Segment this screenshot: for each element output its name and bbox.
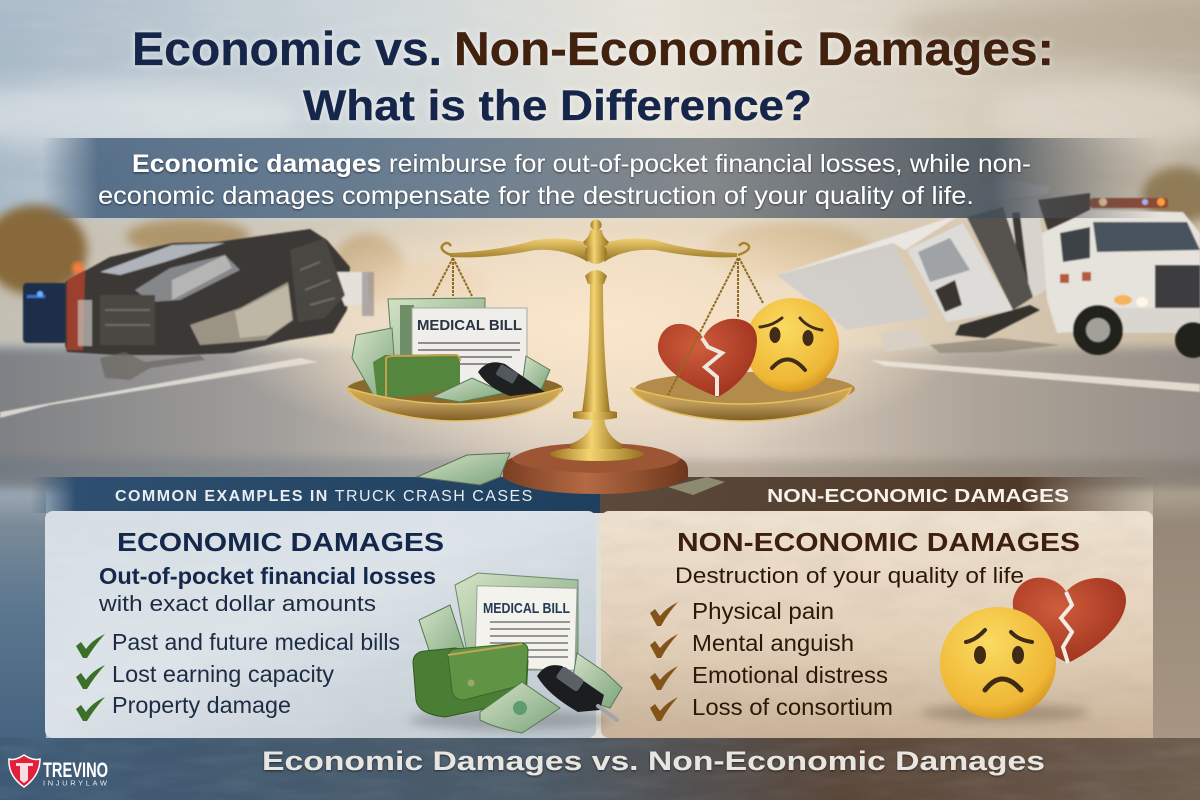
title: Non-Economic Damages:: [454, 22, 1054, 75]
left pan with bills: MEDICAL BILL: [417, 317, 522, 334]
scale base: [503, 284, 688, 494]
logo: Trevino Injury Law: TREVINO: [43, 759, 108, 782]
section bands: [30, 477, 1160, 513]
right chains: [738, 258, 763, 318]
section label: right: NON-ECONOMIC DAMAGES: [767, 486, 1069, 506]
footer caption: Economic Damages vs. Non-Economic Damages: [262, 746, 1045, 776]
bottom background: [0, 470, 1200, 800]
wrecked truck: right: [777, 178, 1200, 358]
icon: money, bill, wallet and keys (panel): MEDICAL BILL: [483, 600, 570, 617]
section label: left: COMMON EXAMPLES IN TRUCK CRASH CASES: [115, 488, 533, 505]
wrecked vehicle: left: [23, 229, 374, 380]
title: Economic vs.: [132, 22, 442, 75]
checklist: Physical pain: [692, 598, 834, 624]
right pan with heart and emoji: [631, 258, 855, 421]
checklist: Loss of consortium: [692, 694, 893, 720]
icon: money, bill, wallet and keys (panel): [410, 573, 622, 733]
title: What is the Difference?: [303, 82, 812, 130]
panel: economic damages: [45, 511, 596, 738]
scale beam: [442, 220, 749, 284]
left chains: [433, 258, 472, 296]
checklist: Emotional distress: [692, 662, 888, 688]
loose cash on ground: [417, 453, 725, 495]
checklist: [650, 598, 893, 721]
scale of justice: [347, 220, 855, 495]
checklist: Mental anguish: [692, 630, 854, 656]
logo: Trevino Injury Law: INJURYLAW: [43, 778, 108, 788]
subheading: [98, 563, 436, 616]
panel: non-economic damages: [601, 511, 1153, 738]
subheading: with exact dollar amounts: [98, 591, 376, 616]
logo: Trevino Injury Law: [9, 755, 108, 788]
checklist: [76, 629, 400, 721]
heading: NON-ECONOMIC DAMAGES: [677, 527, 1080, 557]
intro band: Economic damages reimburse for out-of-pocket financial losses, while non-: [132, 150, 1031, 178]
heading: ECONOMIC DAMAGES: [117, 527, 444, 557]
subheading: Destruction of your quality of life: [675, 563, 1024, 588]
left pan with bills: [347, 298, 563, 421]
subheading: Out-of-pocket financial losses: [99, 563, 436, 589]
checklist: Lost earning capacity: [112, 661, 335, 687]
intro band: economic damages compensate for the destruction of your quality of life.: [98, 182, 974, 210]
checklist: Property damage: [112, 692, 291, 718]
intro band: [42, 138, 1160, 218]
checklist: Past and future medical bills: [112, 629, 400, 655]
icon: sad emoji and broken heart (panel): [920, 578, 1126, 722]
title: [132, 22, 1054, 130]
